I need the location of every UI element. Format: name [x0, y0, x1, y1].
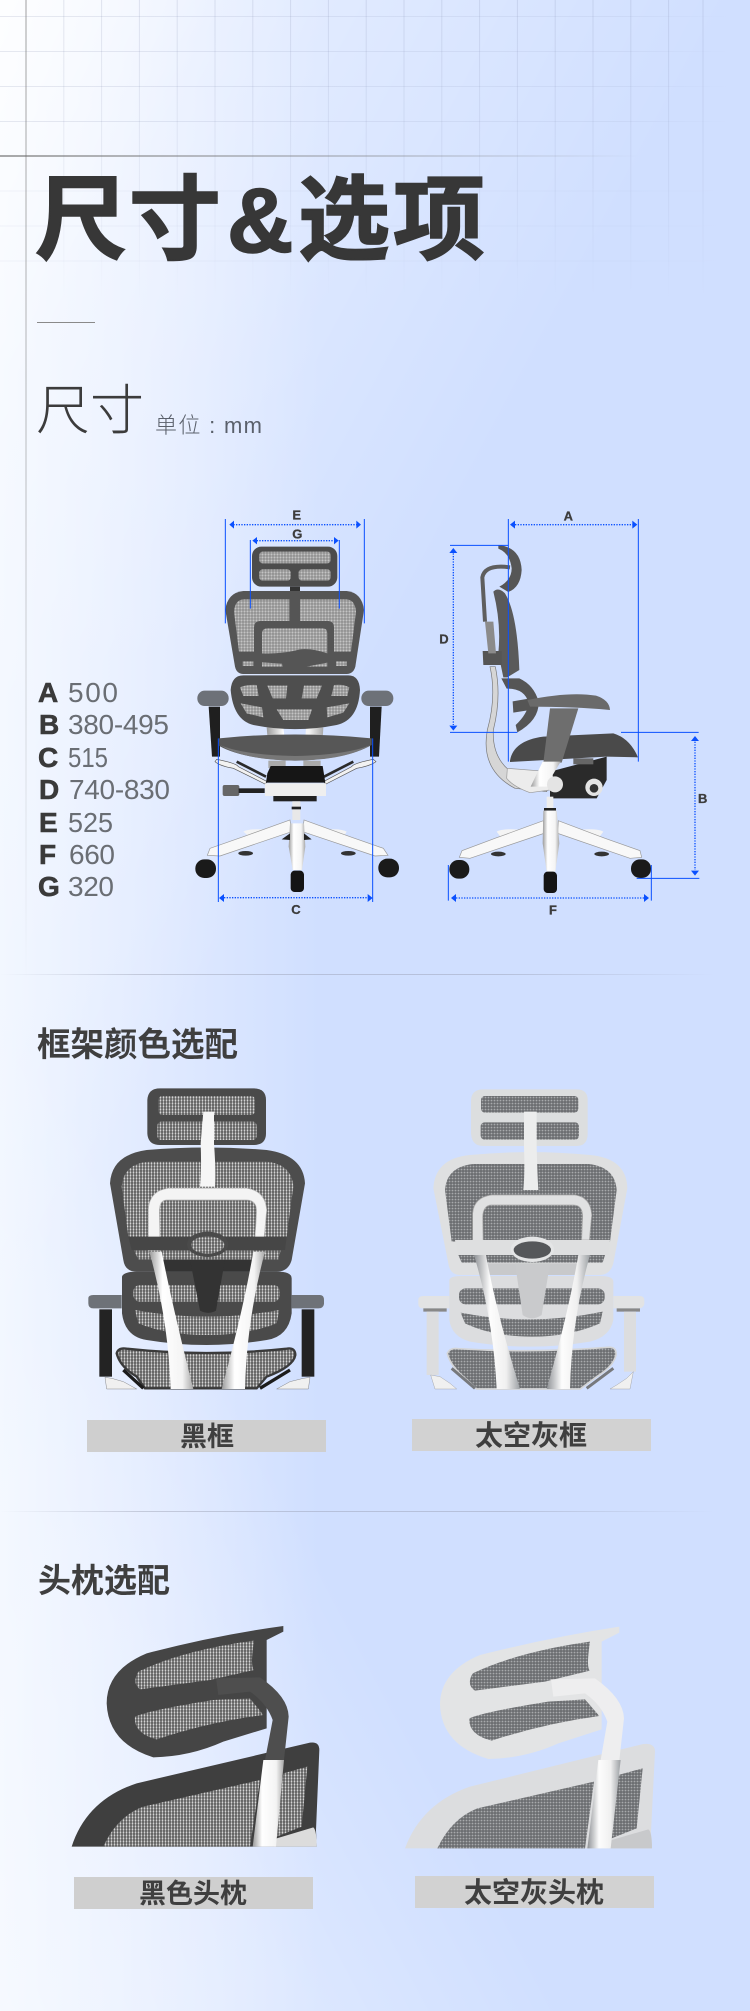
dimensions legend: 740-830	[69, 774, 170, 805]
dimensions legend: B	[39, 709, 59, 740]
dimension lines E G C: E	[292, 508, 301, 523]
dimensions legend	[38, 677, 170, 902]
space grey frame chair	[418, 1089, 644, 1389]
dimensions legend: A	[38, 677, 58, 708]
dimension lines A B D F: B	[698, 791, 707, 806]
caption: space grey headrest	[415, 1876, 654, 1908]
front chair diagram	[195, 508, 399, 917]
dimension lines E G C	[218, 508, 373, 917]
dimension lines A B D F	[439, 509, 707, 918]
dimension lines E G C: C	[291, 902, 301, 917]
dimensions legend: F	[39, 839, 56, 870]
caption: space grey frame	[412, 1419, 651, 1451]
heading: dimensions: 尺寸	[36, 381, 144, 441]
section divider	[0, 974, 715, 975]
unit label: 单位 : mm	[155, 413, 262, 438]
caption: space grey frame: 太空灰框	[475, 1420, 587, 1451]
section divider	[0, 1511, 715, 1512]
caption: black headrest: 黑色头枕	[139, 1879, 247, 1909]
dimension lines E G C: G	[292, 527, 302, 542]
dimensions legend: 515	[68, 742, 108, 773]
caption: space grey headrest: 太空灰头枕	[464, 1877, 604, 1908]
dimensions legend: 380-495	[68, 709, 169, 740]
title rule	[37, 322, 95, 323]
background grid	[0, 0, 730, 980]
dimensions legend: C	[38, 742, 58, 773]
dimensions legend: D	[39, 774, 59, 805]
front chair drawing	[195, 547, 399, 892]
caption: black frame: 黑框	[180, 1422, 234, 1452]
dimensions legend: 500	[68, 677, 118, 708]
black frame chair	[88, 1088, 324, 1389]
dimensions legend: 320	[68, 871, 114, 902]
dimensions legend: E	[39, 807, 58, 838]
dimensions legend: 660	[69, 839, 115, 870]
side chair diagram	[439, 509, 707, 918]
dimensions legend: G	[38, 871, 60, 902]
dimension lines A B D F: A	[564, 509, 574, 524]
heading: headrest options: 头枕选配	[38, 1562, 170, 1599]
black headrest	[72, 1626, 319, 1847]
dimension lines A B D F: F	[549, 903, 557, 918]
dimension lines A B D F: D	[439, 632, 449, 647]
title: 尺寸&选项	[35, 170, 485, 272]
heading: frame colour options: 框架颜色选配	[37, 1027, 238, 1064]
dimensions legend: 525	[68, 807, 113, 838]
side chair drawing	[449, 545, 651, 893]
space grey headrest	[405, 1627, 655, 1848]
caption: black frame	[87, 1420, 326, 1452]
caption: black headrest	[74, 1877, 313, 1909]
